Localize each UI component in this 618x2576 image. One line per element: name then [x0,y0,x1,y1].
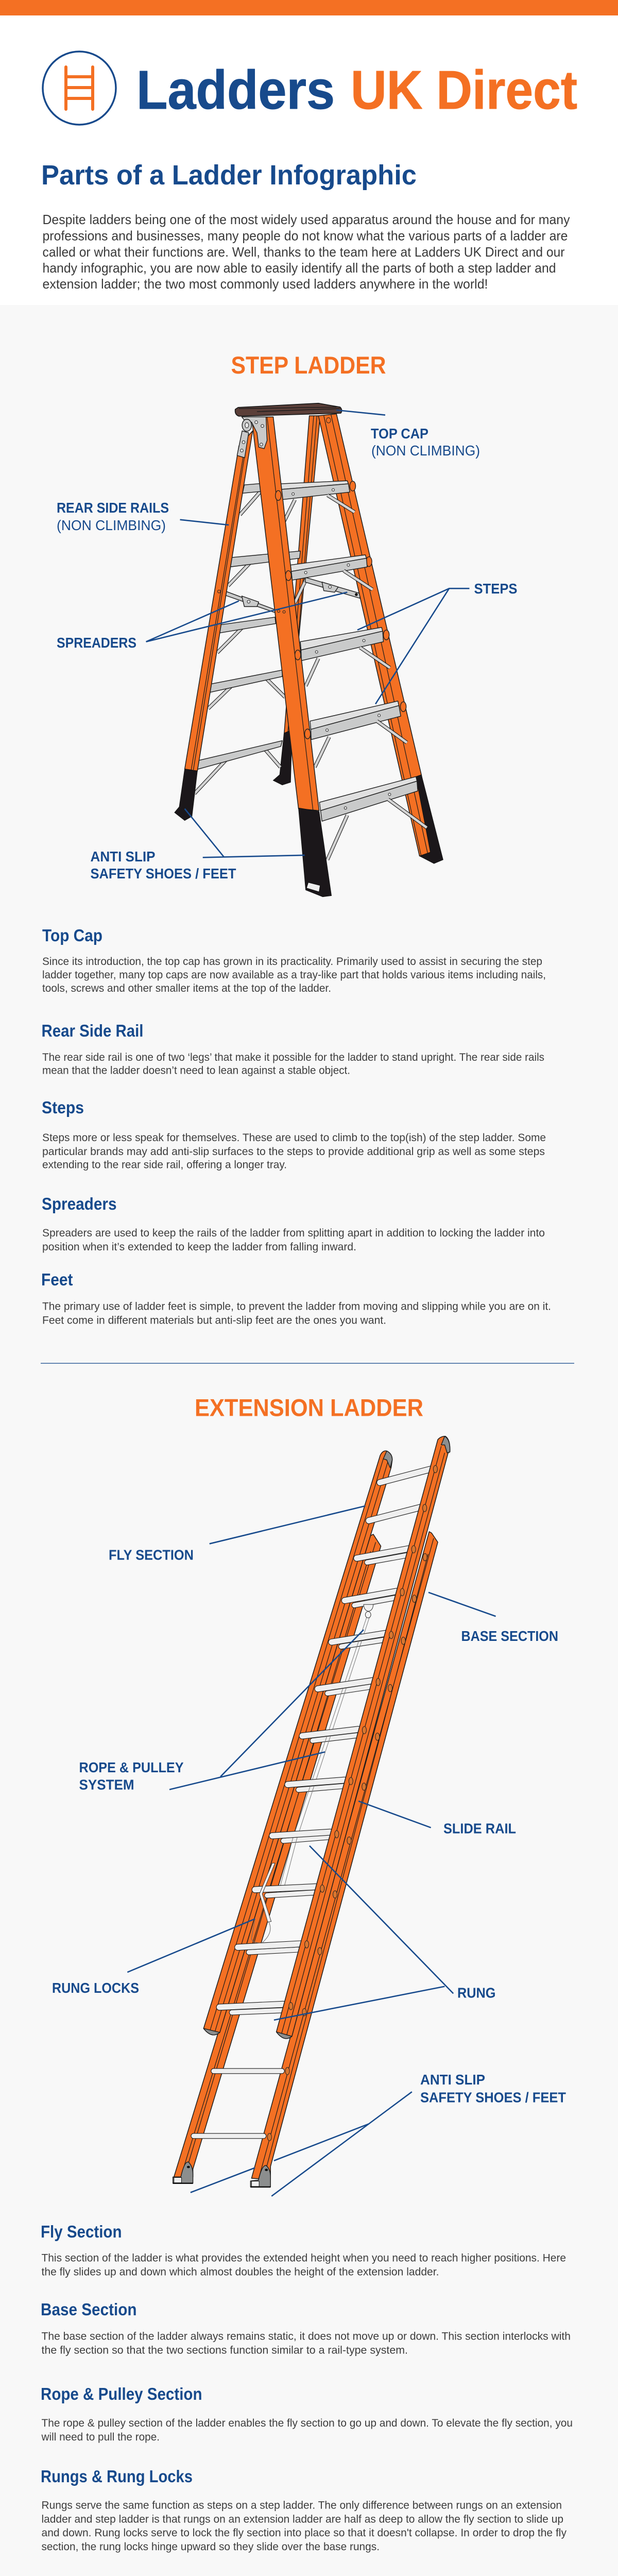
logo: Ladders UK Direct [43,52,577,125]
section: fly section: the fly slides up and down which almost doubles the height of the extension ladder. [41,2266,439,2278]
section: rungs and rung locks: and down. Rung locks serve to lock the fly section into place so that it doesn't collapse. In order to drop the fly [41,2527,566,2539]
intro text block: professions and businesses, many people do not know what the various parts of a ladder are [42,228,568,243]
title: Parts of a Ladder Infographic [41,160,417,191]
section: rungs and rung locks: Rungs & Rung Locks [41,2467,193,2486]
fly section left rail [203,1451,392,2035]
section: rear side rail [41,1021,544,1077]
section: feet [41,1270,551,1326]
section: rear side rail: The rear side rail is one of two ‘legs’ that make it possible for the ladder to stand upright. The rear side rails [42,1052,544,1063]
section: spreaders: Spreaders are used to keep the rails of the ladder from splitting apart in addition to locking the ladder into [42,1227,545,1239]
label: rear side rails [57,500,169,533]
label: fly section: FLY SECTION [109,1547,194,1563]
heading: step ladder: STEP LADDER [231,351,386,379]
rear rungs and braces [195,482,347,860]
spreaders [225,578,360,613]
section: base section: Base Section [41,2300,137,2319]
intro text block: handy infographic, you are now able to easily identify all the parts of both a step ladder and [42,260,556,276]
label: top cap [371,426,480,459]
section: steps [42,1098,546,1171]
section: spreaders: position when it’s extended to keep the ladder from falling inward. [42,1241,356,1253]
logo wordmark: UK Direct [351,60,577,121]
heading: extension ladder: EXTENSION LADDER [195,1394,423,1421]
label: rung: RUNG [457,1985,495,2001]
label: base section: BASE SECTION [461,1628,558,1644]
label: rear side rails: (NON CLIMBING) [57,517,166,533]
section: steps: Steps [42,1098,84,1117]
section: base section: The base section of the ladder always remains static, it does not move up or down. This section interlocks with [41,2331,571,2342]
intro text block: extension ladder; the two most commonly used ladders anywhere in the world! [42,276,488,292]
label: anti slip safety shoes: SAFETY SHOES / FEET [91,866,236,882]
section: base section: the fly section so that the two sections function similar to a rail-type system. [41,2344,408,2357]
label: top cap: (NON CLIMBING) [371,443,480,459]
step ladder leader lines [146,410,469,857]
label: slide rail: SLIDE RAIL [443,1821,516,1837]
section: top cap: tools, screws and other smaller items at the top of the ladder. [42,982,331,994]
section: rope and pulley [41,2384,573,2443]
top cap [235,403,342,416]
base section rungs [194,1555,407,2136]
rear left rail and shoe [175,431,253,820]
section: steps: Steps more or less speak for themselves. These are used to climb to the top(ish) of the step ladder. Some [42,1132,546,1144]
section: steps: extending to the rear side rail, offering a longer tray. [42,1159,287,1171]
intro text block: Despite ladders being one of the most widely used apparatus around the house and for many [42,212,570,227]
label: anti slip safety shoes: ANTI SLIP [91,849,156,865]
front right rail and shoe [318,414,443,863]
logo wordmark [136,60,577,121]
label: anti slip safety shoes: SAFETY SHOES / FEET [420,2090,566,2105]
section: rear side rail: mean that the ladder doesn’t need to lean against a stable object. [42,1064,350,1077]
base feet [173,2162,270,2187]
label: anti slip safety shoes [91,849,236,882]
fly section rungs [219,1469,431,2007]
front left rail and shoe [251,417,331,897]
label: rung locks: RUNG LOCKS [52,1980,139,1996]
section: rungs and rung locks: section, the rung locks hinge upward so they slide over the base rungs. [41,2541,380,2553]
section: top cap: Since its introduction, the top cap has grown in its practicality. Primarily used to assist in securing the step [42,956,542,968]
section: top cap: ladder together, many top caps are now available as a tray-like part that holds various items including nails, [42,969,546,981]
steps [281,481,427,827]
rung lock [251,1863,275,1943]
section: rungs and rung locks: ladder and step ladder is that rungs on an extension ladder are half as deep to allow the fly section to slide up [41,2513,563,2526]
fly section right rail [277,1436,450,2039]
section: base section [41,2300,571,2357]
label: rope and pulley system: SYSTEM [79,1776,134,1793]
rope and pulley [279,1604,373,1890]
logo wordmark: Ladders [136,60,335,121]
label: spreaders: SPREADERS [57,635,136,651]
intro text block [42,212,570,292]
section: fly section: Fly Section [41,2222,122,2241]
base section rails [174,1532,438,2180]
rear right rail [273,416,320,785]
section: spreaders [42,1194,545,1253]
illustration: step ladder [175,403,443,897]
label: rope and pulley system: ROPE & PULLEY [79,1759,184,1775]
extension ladder leader lines [127,1506,496,2196]
section: rope and pulley: The rope & pulley section of the ladder enables the fly section to go up and down. To elevate the fly section, you [41,2417,573,2429]
section: top cap: Top Cap [42,926,102,945]
illustration: extension ladder [173,1436,450,2187]
label: anti slip safety shoes [420,2072,566,2105]
section: rear side rail: Rear Side Rail [41,1021,143,1040]
icon: ladder in circle [43,52,116,125]
hinge bracket [237,417,267,457]
section: rungs and rung locks [41,2467,566,2553]
label: anti slip safety shoes: ANTI SLIP [420,2072,485,2088]
section: steps: particular brands may add anti-slip surfaces to the steps to provide additional grip as well as some steps [42,1146,545,1158]
section: top cap [42,926,546,994]
section: rope and pulley: Rope & Pulley Section [41,2384,202,2403]
label: rope and pulley system [79,1759,184,1793]
section: feet: Feet come in different materials but anti-slip feet are the ones you want. [42,1315,386,1326]
section: rope and pulley: will need to pull the rope. [41,2431,160,2443]
section: fly section: This section of the ladder is what provides the extended height when you need to reach higher positions. Here [41,2252,566,2264]
section: spreaders: Spreaders [42,1194,116,1213]
top orange bar [0,0,618,15]
label: steps: STEPS [474,581,517,597]
section: fly section [41,2222,566,2278]
label: top cap: TOP CAP [371,426,428,442]
section: feet: The primary use of ladder feet is simple, to prevent the ladder from moving and slipping while you are on it. [42,1300,551,1313]
section: feet: Feet [41,1270,73,1289]
section: rungs and rung locks: Rungs serve the same function as steps on a step ladder. The only difference between rungs on an extension [41,2500,562,2511]
intro text block: called or what their functions are. Well, thanks to the team here at Ladders UK Direct and our [42,244,565,260]
label: rear side rails: REAR SIDE RAILS [57,500,169,516]
